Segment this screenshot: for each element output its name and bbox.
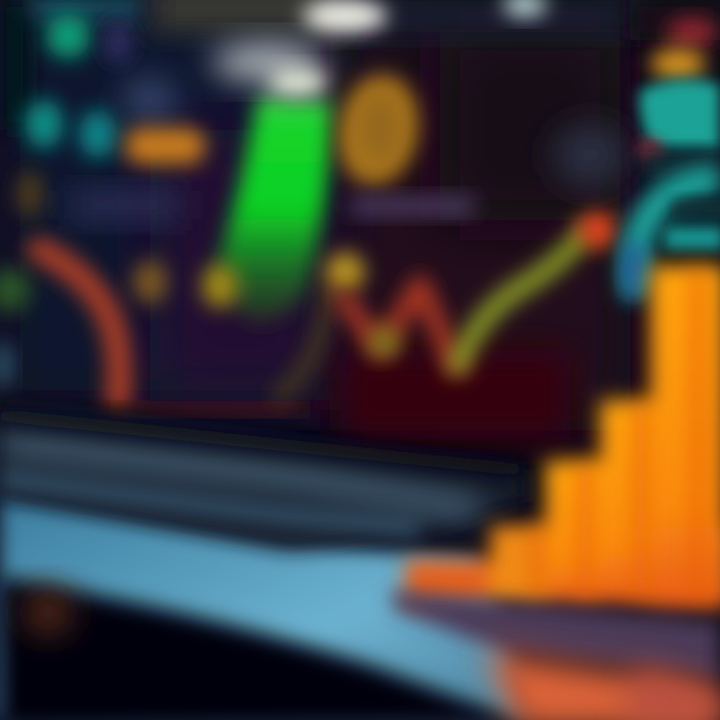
reflective table: [390, 590, 720, 720]
desk surface: [0, 495, 530, 720]
faint chart label: [350, 196, 475, 216]
top wall highlights: [30, 0, 640, 33]
green rising bar: [202, 42, 332, 322]
orange bar chart: [405, 265, 720, 610]
rising zigzag line: [275, 211, 617, 400]
right figure: [552, 0, 720, 300]
gold coin: [329, 68, 427, 192]
left candlesticks and indicators: [0, 14, 205, 389]
red descending line: [40, 250, 300, 414]
laptop edge: [0, 405, 525, 550]
